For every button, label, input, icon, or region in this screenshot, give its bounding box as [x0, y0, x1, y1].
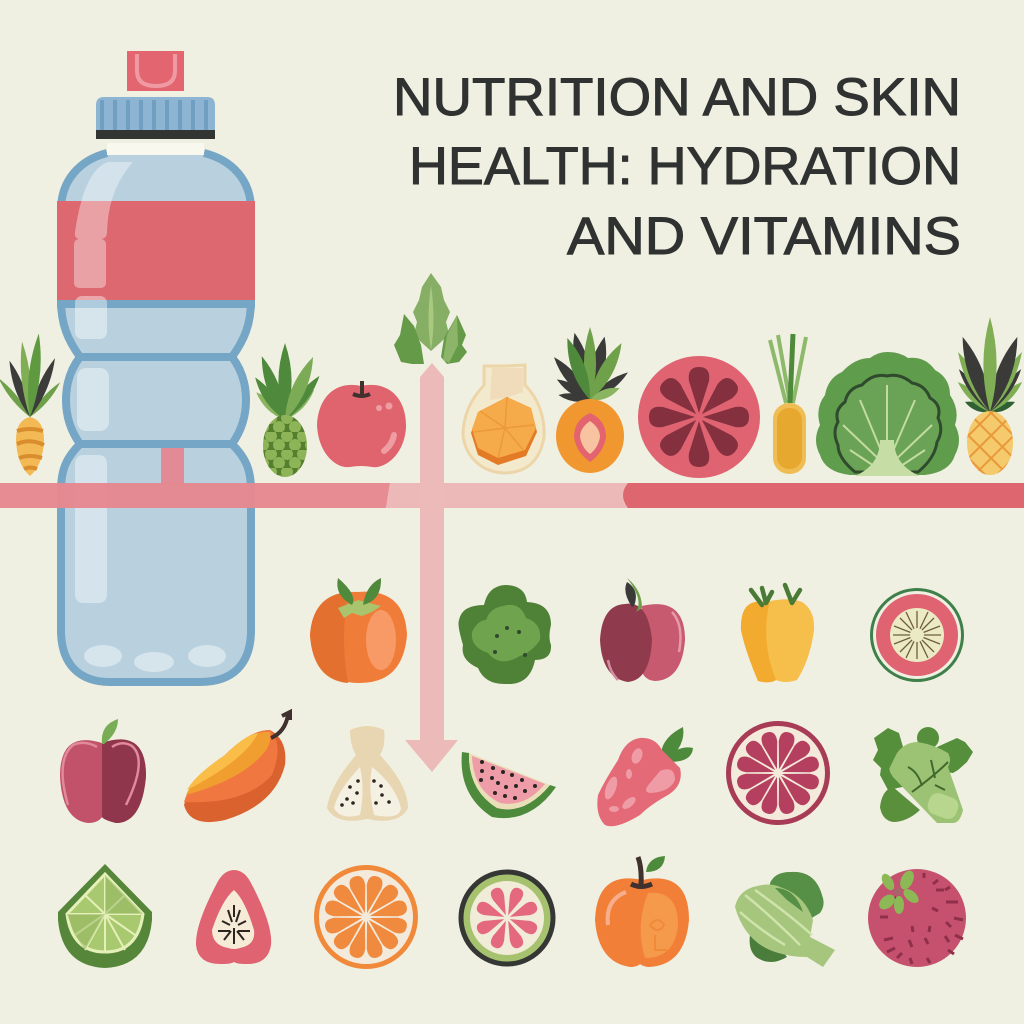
icon: strawberry pepper [597, 727, 693, 826]
icon: pineapple right [953, 317, 1024, 475]
vertical arrow [405, 363, 458, 772]
icon: plum apple [600, 578, 685, 682]
title: HEALTH: HYDRATION [409, 137, 961, 196]
icon: orange in jar [463, 365, 544, 473]
icon: lettuce [816, 352, 959, 476]
icon: blood orange [728, 724, 828, 822]
icon: leafy greens [873, 727, 973, 823]
icon: red apple halved [60, 719, 146, 823]
icon: guava wedge [196, 870, 271, 964]
title [393, 68, 961, 266]
icon: carrot stick [770, 334, 806, 474]
icon: carrot with leaves [0, 333, 62, 476]
title: AND VITAMINS [567, 207, 961, 266]
icon: orange slice [316, 868, 416, 966]
icon: cabbage [735, 872, 835, 967]
icon: herb leaves [394, 273, 467, 364]
icon: guava slice [872, 590, 962, 680]
icon: orange pineapple [550, 327, 631, 473]
water bottle [57, 51, 255, 682]
icon: peach [595, 856, 689, 967]
icon: tomato [310, 578, 407, 683]
icon: broccoli [458, 585, 551, 684]
title: NUTRITION AND SKIN [393, 68, 961, 127]
icon: large grapefruit [638, 356, 760, 478]
icon: green pineapple [251, 343, 323, 477]
horizontal band [0, 483, 1024, 508]
icon: lime wedge [58, 864, 152, 968]
icon: garlic [327, 726, 408, 821]
icon: red apple [317, 381, 406, 467]
icon: dark rim grapefruit [461, 872, 553, 964]
icon: yellow pepper [741, 585, 814, 682]
icon: mango [184, 712, 290, 822]
icon: berry [868, 868, 966, 967]
icon: watermelon slice [462, 752, 556, 818]
